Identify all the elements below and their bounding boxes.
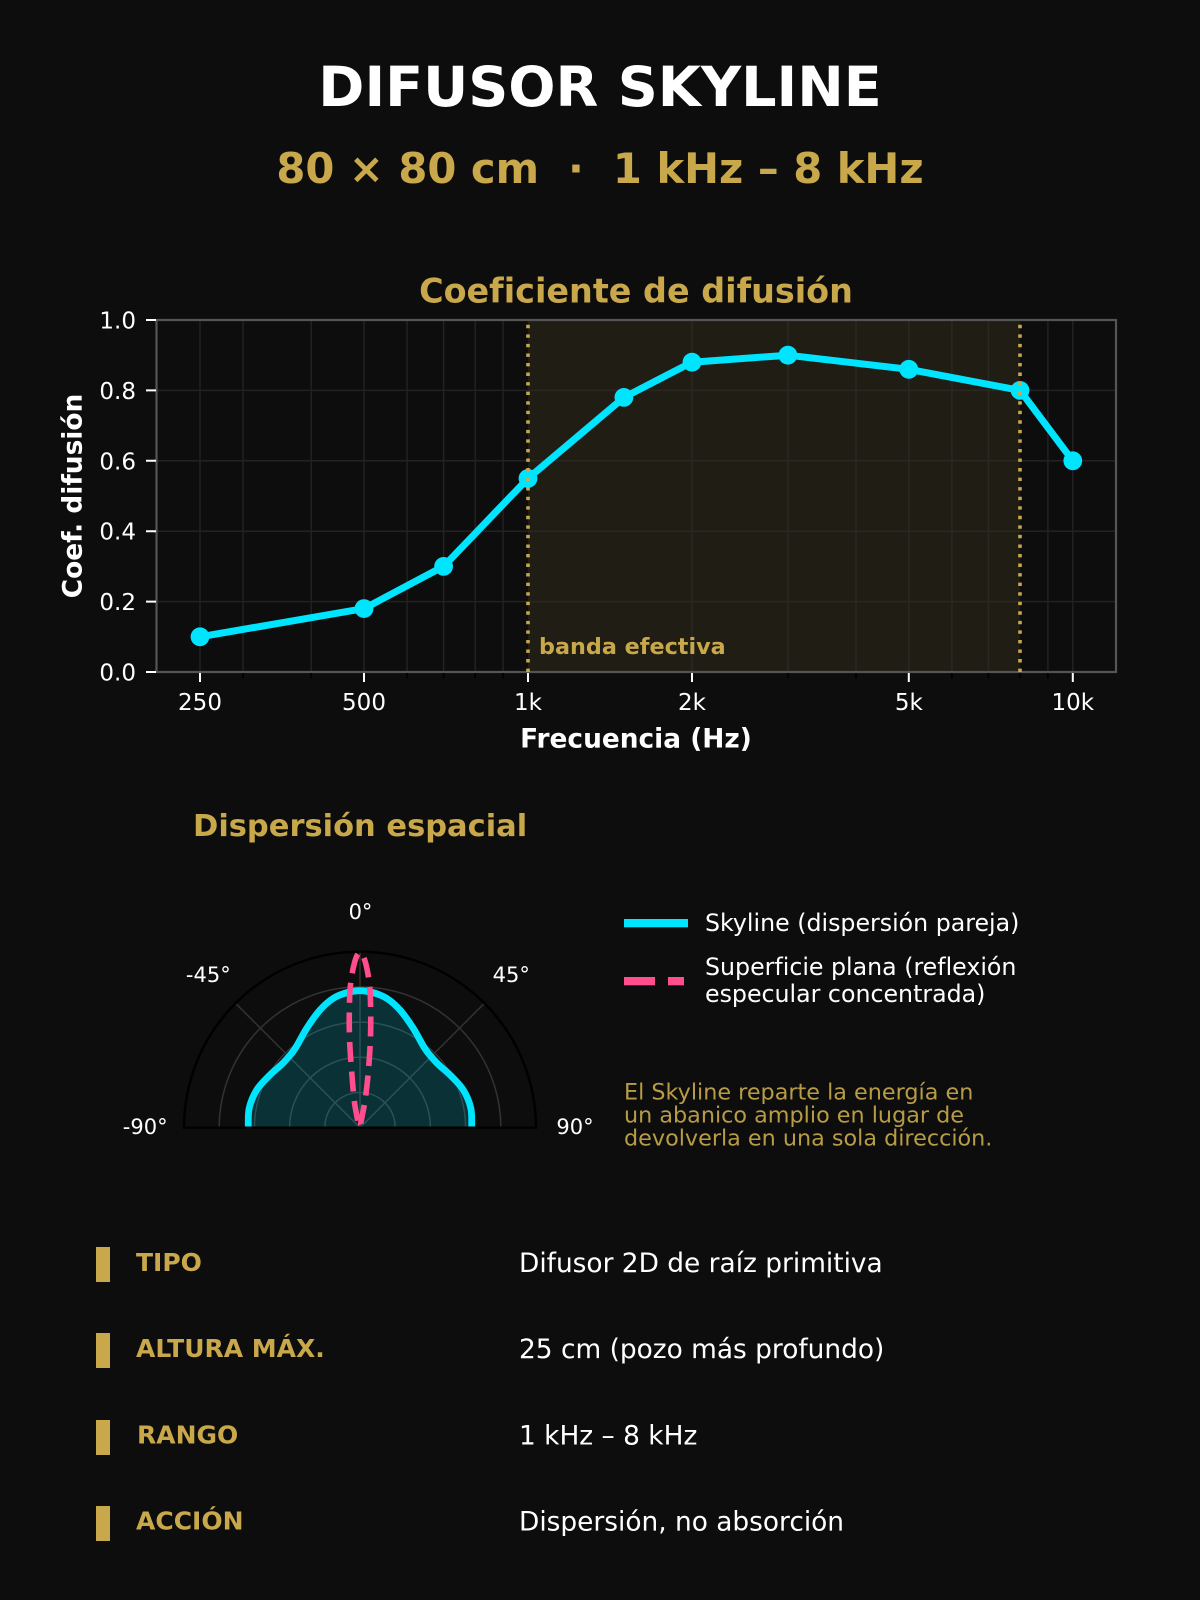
spec row: tipo — [96, 1247, 883, 1282]
polar frame — [184, 952, 536, 1128]
explanatory note — [624, 1080, 992, 1152]
spec row: rango: 1 kHz – 8 kHz — [519, 1420, 697, 1452]
spec row: altura: ALTURA MÁX. — [136, 1334, 325, 1363]
spec row: tipo: Difusor 2D de raíz primitiva — [519, 1248, 883, 1279]
spec row: rango: RANGO — [137, 1420, 238, 1450]
polar angle labels: -90° — [123, 1115, 168, 1139]
polar angle labels: 90° — [556, 1115, 594, 1139]
spec row: altura: 25 cm (pozo más profundo) — [519, 1334, 884, 1365]
chart heading: Coeficiente de difusión — [419, 272, 853, 310]
subtitle: 80 × 80 cm · 1 kHz – 8 kHz — [276, 144, 924, 193]
legend: flat surface — [624, 953, 1016, 1008]
spec row: altura — [96, 1333, 884, 1368]
y tick labels: 1.0 — [99, 308, 136, 334]
y tick labels: 0.0 — [99, 660, 136, 686]
flat surface lobe — [349, 953, 371, 1127]
x tick labels: 1k — [514, 690, 543, 716]
effective band shading — [528, 320, 1020, 672]
x tick labels: 5k — [895, 690, 923, 716]
explanatory note: devolverla en una sola dirección. — [624, 1126, 992, 1152]
spec row: accion — [96, 1506, 844, 1541]
band limit lines — [528, 320, 1020, 672]
polar chart: spatial dispersion — [123, 900, 594, 1139]
polar heading: Dispersión espacial — [193, 809, 527, 844]
polar grid — [219, 952, 501, 1128]
skyline pattern fill — [248, 991, 472, 1128]
spec row: accion: Dispersión, no absorción — [519, 1506, 844, 1538]
spec row: tipo: TIPO — [136, 1248, 202, 1277]
title: DIFUSOR SKYLINE — [318, 55, 882, 120]
spec row: rango — [96, 1420, 697, 1455]
band label: banda efectiva — [539, 634, 726, 660]
legend: flat surface: especular concentrada) — [705, 980, 985, 1008]
skyline pattern outline — [248, 991, 472, 1128]
explanatory note: El Skyline reparte la energía en — [624, 1080, 973, 1106]
x tick labels — [178, 690, 1095, 716]
y tick labels: 0.2 — [99, 590, 136, 616]
polar angle labels — [123, 900, 594, 1139]
polar angle labels: 45° — [493, 963, 530, 987]
explanatory note: un abanico amplio en lugar de — [624, 1102, 964, 1128]
y tick labels: 0.4 — [99, 520, 136, 546]
legend: flat surface: Superficie plana (reflexión — [705, 953, 1016, 981]
y tick labels: 0.6 — [99, 449, 136, 475]
plot frame — [156, 320, 1116, 672]
polar angle labels: 0° — [349, 900, 372, 924]
y tick labels — [99, 308, 136, 686]
spec row: accion: ACCIÓN — [136, 1506, 244, 1536]
polar angle labels: -45° — [186, 963, 231, 987]
legend — [624, 909, 1019, 1008]
x axis label: Frecuencia (Hz) — [520, 724, 752, 754]
x tick labels: 10k — [1052, 690, 1095, 716]
x tick labels: 250 — [178, 690, 222, 716]
major ticks — [146, 320, 1073, 682]
minor x ticks — [243, 673, 1048, 678]
legend: skyline: Skyline (dispersión pareja) — [705, 909, 1019, 937]
x tick labels: 500 — [342, 690, 386, 716]
diffusion curve — [191, 346, 1082, 646]
x tick labels: 2k — [678, 690, 707, 716]
y axis label: Coef. difusión — [58, 394, 88, 598]
line chart: diffusion coefficient — [58, 308, 1116, 754]
y tick labels: 0.8 — [99, 379, 136, 405]
